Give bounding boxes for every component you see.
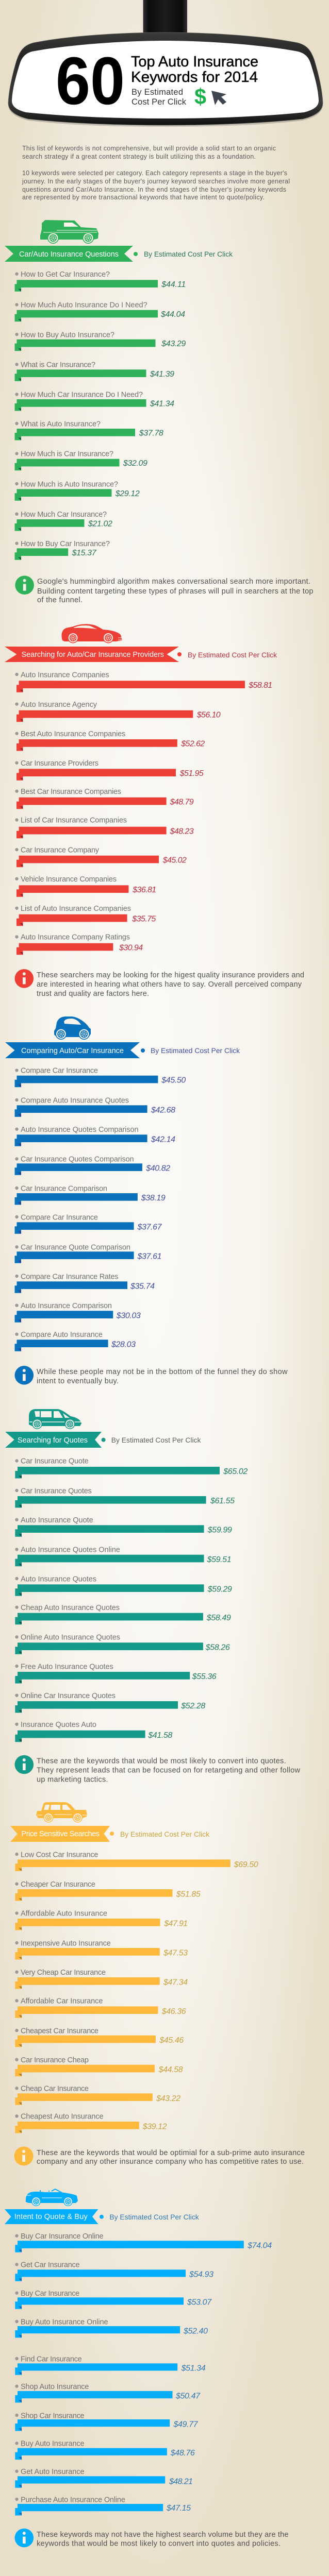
bar: Buy Auto Insurance (15, 2440, 195, 2460)
bar: How to Buy Auto Insurance? (14, 331, 186, 351)
ribbon heading: Intent to Quote & Buy (14, 2213, 88, 2221)
intro text: are represented by more transactional keywords that have intent to quote/policy. (22, 194, 265, 201)
bar: What is Car Insurance? (14, 361, 174, 381)
bar: List of Auto Insurance Companies: $35.75 (131, 914, 156, 923)
mirror stem (143, 0, 187, 36)
callout: hummingbird note: Building content targeting these types of phrases will pull in searchers at the top (37, 587, 314, 596)
bar: Online Auto Insurance Quotes: $58.26 (205, 1643, 230, 1652)
intro text: journey. In the early stages of the buyer's journey keyword searches involve more general (22, 178, 290, 185)
bar: Car Insurance Quote: $65.02 (223, 1467, 248, 1476)
bar: List of Car Insurance Companies (15, 817, 194, 838)
bar: Compare Auto Insurance: Compare Auto Insurance (21, 1331, 103, 1339)
bar: How Much Auto Insurance Do I Need? (14, 301, 185, 321)
bar: List of Auto Insurance Companies (15, 905, 156, 926)
ribbon heading (5, 1432, 102, 1448)
title text: Top Auto Insurance (131, 54, 258, 70)
bar: Auto Insurance Quotes Comparison: $42.14 (151, 1135, 175, 1144)
bar: Purchase Auto Insurance Online (15, 2496, 191, 2515)
bar: Best Auto Insurance Companies (15, 730, 205, 751)
bar: Online Car Insurance Quotes: Online Car Insurance Quotes (21, 1692, 116, 1700)
bar: Very Cheap Car Insurance: $47.34 (163, 1978, 188, 1987)
bar: Buy Car Insurance Online: $74.04 (247, 2242, 272, 2250)
ribbon heading: Car/Auto Insurance Questions (19, 250, 119, 259)
bar: Affordable Car Insurance: Affordable Car Insurance (21, 1997, 103, 2006)
bar: What is Car Insurance?: What is Car Insurance? (21, 361, 95, 369)
bar: Best Auto Insurance Companies: $52.62 (180, 740, 205, 749)
bar: Auto Insurance Quotes Online: Auto Insurance Quotes Online (21, 1546, 120, 1554)
intro text: This list of keywords is not comprehensive, but will provide a solid start to an organic (22, 145, 276, 152)
bar: Cheaper Car Insurance: $51.85 (176, 1890, 201, 1899)
ribbon heading (5, 2209, 98, 2224)
bar: Free Auto Insurance Quotes: $55.36 (192, 1672, 217, 1681)
bar: Online Car Insurance Quotes (15, 1692, 205, 1713)
bar: Free Auto Insurance Quotes: Free Auto Insurance Quotes (21, 1663, 113, 1671)
bar: Auto Insurance Comparison: $30.03 (116, 1311, 141, 1320)
bar: Buy Auto Insurance Online: $52.40 (183, 2327, 208, 2335)
bar: What is Auto Insurance?: $37.78 (139, 429, 163, 438)
bar: Cheap Car Insurance: Cheap Car Insurance (21, 2085, 89, 2093)
callout: hummingbird note: of the funnel. (37, 596, 83, 604)
bar: Car Insurance Providers (15, 759, 204, 781)
bar: How Much is Auto Insurance?: How Much is Auto Insurance? (21, 480, 118, 488)
ribbon heading (5, 246, 133, 262)
bar: Get Car Insurance: Get Car Insurance (21, 2261, 80, 2269)
bar: Cheap Auto Insurance Quotes (15, 1604, 231, 1624)
intro text: questions around Car/Auto Insurance. In the end stages of the buyer's journey keywords (22, 186, 286, 193)
bar: How to Buy Auto Insurance?: How to Buy Auto Insurance? (21, 331, 114, 339)
bar: Auto Insurance Quotes Comparison (14, 1126, 175, 1146)
title text: Keywords for 2014 (131, 69, 258, 86)
bar: Inexpensive Auto Insurance: $47.53 (163, 1948, 188, 1958)
bar: How Much Car Insurance Do I Need?: How Much Car Insurance Do I Need? (21, 391, 143, 399)
callout: provider searchers note (14, 969, 304, 998)
bar: How to Get Car Insurance?: How to Get Car Insurance? (21, 270, 110, 279)
panel: Car/Auto Insurance Questions (5, 220, 314, 604)
legend: by estimated cost per click: By Estimated Cost Per Click (188, 651, 277, 659)
callout: funnel note (14, 1366, 288, 1385)
bar: Auto Insurance Quotes Comparison: Auto Insurance Quotes Comparison (21, 1126, 139, 1134)
bar: Car Insurance Cheap: $44.58 (158, 2065, 183, 2074)
bar: Very Cheap Car Insurance: Very Cheap Car Insurance (21, 1969, 106, 1977)
bar: Purchase Auto Insurance Online: Purchase Auto Insurance Online (21, 2496, 125, 2504)
bar: Auto Insurance Companies: $58.81 (248, 681, 272, 690)
icon: sky-blue convertible (26, 2189, 78, 2206)
bar: Auto Insurance Quote: $59.99 (207, 1526, 232, 1535)
bar: Low Cost Car Insurance: Low Cost Car Insurance (21, 1851, 98, 1859)
bar: Insurance Quotes Auto: Insurance Quotes Auto (21, 1721, 96, 1729)
bar: How Much Car Insurance? (14, 511, 112, 531)
bar: Compare Car Insurance (14, 1067, 186, 1087)
callout: sub-prime note: company and any other insurance company who has competitive rates to use. (37, 2158, 304, 2166)
bar: Car Insurance Comparison (14, 1184, 166, 1205)
title number 60: 60 (56, 43, 125, 118)
bar: Best Car Insurance Companies (15, 788, 194, 809)
subtitle: Cost Per Click (131, 97, 187, 107)
bar: Auto Insurance Agency: $56.10 (196, 710, 221, 719)
intro text: 10 keywords were selected per category. Each category represents a stage in the buyer's (22, 170, 287, 177)
bar: Inexpensive Auto Insurance (15, 1939, 188, 1960)
bar: How to Buy Car Insurance?: $15.37 (72, 549, 97, 557)
bar: Affordable Car Insurance: $46.36 (161, 2007, 186, 2016)
bar: How Much is Car Insurance?: How Much is Car Insurance? (21, 450, 113, 459)
bar: Buy Car Insurance: Buy Car Insurance (21, 2290, 79, 2298)
bar: How to Buy Auto Insurance?: $43.29 (161, 340, 186, 348)
bar: Find Car Insurance (15, 2355, 206, 2375)
bar: How Much is Car Insurance? (14, 450, 147, 470)
panel: Searching for Auto/Car Insurance Providers (5, 624, 304, 998)
bar: Auto Insurance Comparison (14, 1302, 141, 1323)
icon: dollar sign: $ (194, 84, 206, 109)
bar: Best Auto Insurance Companies: Best Auto Insurance Companies (21, 730, 125, 738)
bar: Buy Car Insurance: $53.07 (187, 2298, 212, 2307)
bar: Shop Auto Insurance: Shop Auto Insurance (21, 2383, 89, 2391)
bar: Best Car Insurance Companies: $48.79 (170, 798, 194, 806)
callout: sub-prime note: These are the keywords that would be optimial for a sub-prime auto insurance (37, 2149, 305, 2157)
bar: Compare Car Insurance Rates: Compare Car Insurance Rates (21, 1273, 119, 1281)
bar: Car Insurance Company: $45.02 (162, 856, 187, 865)
callout: sub-prime note (14, 2146, 305, 2166)
bar: Buy Car Insurance Online (15, 2232, 272, 2252)
bar: Low Cost Car Insurance: $69.50 (234, 1860, 258, 1869)
bar: Auto Insurance Companies (15, 671, 272, 692)
bar: How Much Car Insurance?: How Much Car Insurance? (21, 511, 107, 519)
bar: Compare Auto Insurance Quotes (14, 1096, 175, 1117)
bar: Auto Insurance Quotes: Auto Insurance Quotes (21, 1575, 96, 1583)
bar: Cheap Car Insurance (15, 2085, 180, 2105)
bar: Auto Insurance Quotes (15, 1575, 232, 1596)
bar: Get Car Insurance (15, 2261, 213, 2281)
bar: Insurance Quotes Auto (15, 1721, 172, 1742)
panel: Price Sensitive Searches (10, 1802, 305, 2166)
bar: Car Insurance Cheap: Car Insurance Cheap (21, 2056, 89, 2064)
callout: conversion note: These are the keywords that would be most likely to convert into quotes. (37, 1757, 286, 1765)
intro text (22, 145, 290, 201)
bar: Auto Insurance Company Ratings: $30.94 (119, 943, 143, 952)
bar: Auto Insurance Companies: Auto Insurance Companies (21, 671, 109, 679)
bar: Car Insurance Quotes: $61.55 (210, 1497, 235, 1505)
bar: Shop Car Insurance: Shop Car Insurance (21, 2412, 85, 2420)
legend: by estimated cost per click: By Estimated Cost Per Click (111, 1436, 201, 1444)
bar: How Much is Car Insurance?: $32.09 (123, 459, 147, 468)
bar: Auto Insurance Comparison: Auto Insurance Comparison (21, 1302, 112, 1310)
bar: Compare Car Insurance: $45.50 (161, 1076, 186, 1085)
bar: Auto Insurance Agency: Auto Insurance Agency (21, 701, 97, 709)
panel: Comparing Auto/Car Insurance (5, 1016, 288, 1385)
title text (131, 54, 258, 86)
callout: hummingbird note: Google's hummingbird algorithm makes conversational search more important. (37, 578, 310, 586)
ribbon heading (5, 647, 179, 662)
bar: How to Get Car Insurance?: $44.11 (161, 280, 186, 289)
ribbon heading (10, 1826, 110, 1842)
icon: green SUV (40, 220, 98, 244)
bar: Buy Auto Insurance: Buy Auto Insurance (21, 2440, 85, 2448)
bar: Car Insurance Comparison: Car Insurance Comparison (21, 1184, 107, 1193)
bar: Car Insurance Cheap (15, 2056, 183, 2076)
callout: conversion note: up marketing tactics. (37, 1775, 108, 1784)
bar: How Much Car Insurance Do I Need?: $41.34 (150, 400, 174, 408)
subtitle: By Estimated (131, 88, 183, 97)
bar: What is Car Insurance?: $41.39 (150, 370, 174, 379)
bar: Buy Auto Insurance Online: Buy Auto Insurance Online (21, 2318, 108, 2326)
bar: Shop Car Insurance: $49.77 (173, 2420, 199, 2429)
bar: Car Insurance Quotes Comparison: Car Insurance Quotes Comparison (21, 1156, 134, 1164)
icon: teal van (29, 1409, 81, 1429)
callout: funnel note: intent to eventually buy. (37, 1377, 119, 1385)
callout: conversion note: They represent leads that can be focused on for retargeting and other follow (37, 1766, 301, 1774)
bar: Compare Auto Insurance Quotes: Compare Auto Insurance Quotes (21, 1096, 129, 1105)
subtitle (131, 88, 187, 107)
bar: Car Insurance Quotes (15, 1487, 235, 1507)
bar: Shop Auto Insurance: $50.47 (175, 2392, 201, 2400)
bar: Buy Auto Insurance Online (15, 2318, 208, 2338)
bar: How Much Auto Insurance Do I Need?: How Much Auto Insurance Do I Need? (21, 301, 147, 310)
bar: Compare Car Insurance: Compare Car Insurance (21, 1067, 98, 1075)
bar: Auto Insurance Company Ratings: Auto Insurance Company Ratings (21, 934, 130, 942)
bar: Get Auto Insurance (15, 2468, 193, 2488)
mirror glass (12, 41, 319, 118)
bar: Buy Car Insurance Online: Buy Car Insurance Online (21, 2232, 104, 2241)
bar: Car Insurance Company (15, 846, 187, 867)
bar: How Much Car Insurance?: $21.02 (88, 519, 112, 529)
bar: Car Insurance Quotes Comparison (14, 1156, 170, 1175)
bar: Vehicle Insurance Companies (15, 875, 156, 897)
bar: Cheapest Auto Insurance (15, 2113, 167, 2133)
bar: Best Car Insurance Companies: Best Car Insurance Companies (21, 788, 121, 796)
callout: provider searchers note: trust and quality are factors here. (37, 990, 149, 998)
ribbon heading (5, 1042, 140, 1058)
ribbon heading: Comparing Auto/Car Insurance (21, 1047, 124, 1055)
bar: Find Car Insurance: Find Car Insurance (21, 2355, 82, 2363)
legend: by estimated cost per click: By Estimated Cost Per Click (109, 2213, 199, 2221)
bar: Find Car Insurance: $51.34 (181, 2364, 206, 2373)
panel: Intent to Quote & Buy (5, 2189, 289, 2548)
bar: List of Car Insurance Companies: $48.23 (170, 827, 194, 836)
bar: Compare Car Insurance Rates (14, 1273, 155, 1293)
legend: by estimated cost per click: By Estimated Cost Per Click (144, 250, 233, 258)
bar: Buy Car Insurance (15, 2290, 212, 2309)
bar: Car Insurance Quote Comparison: $37.61 (137, 1252, 162, 1261)
bar: Car Insurance Comparison: $38.19 (141, 1194, 166, 1202)
mirror frame (8, 32, 323, 125)
bar: Car Insurance Providers: Car Insurance Providers (21, 759, 98, 768)
bar: Compare Car Insurance (second listing) (14, 1213, 162, 1234)
callout: hummingbird note (15, 575, 314, 604)
bar: Affordable Car Insurance (15, 1997, 186, 2018)
bar: Vehicle Insurance Companies: $36.81 (132, 886, 156, 894)
bar: Affordable Auto Insurance: $47.91 (163, 1920, 188, 1928)
bar: How to Get Car Insurance? (14, 270, 186, 292)
bar: Buy Auto Insurance: $48.76 (170, 2449, 195, 2458)
icon: yellow sedan (36, 1802, 87, 1822)
bar: Car Insurance Quote Comparison (14, 1244, 162, 1263)
callout: conversion note (14, 1755, 301, 1784)
bar: What is Auto Insurance? (14, 420, 163, 440)
callout: provider searchers note: These searchers may be looking for the higest quality insurance providers and (37, 971, 304, 979)
bar: Cheapest Car Insurance: $45.46 (159, 2036, 184, 2045)
callout: search volume note: These keywords may not have the highest search volume but they are the (37, 2531, 289, 2539)
bar: Online Auto Insurance Quotes: Online Auto Insurance Quotes (21, 1634, 120, 1642)
bar: Compare Car Insurance (second listing): Compare Car Insurance (21, 1213, 98, 1222)
bar: Auto Insurance Quotes Online (15, 1546, 232, 1566)
legend: by estimated cost per click: By Estimated Cost Per Click (120, 1831, 209, 1838)
icon: red sports car (61, 624, 122, 643)
bar: Shop Auto Insurance (15, 2383, 201, 2403)
bar: How Much is Auto Insurance? (14, 480, 140, 501)
callout: provider searchers note: are interested in hearing what others have to say. Overall perceived company (37, 980, 302, 989)
bar: Shop Car Insurance (15, 2412, 199, 2431)
callout: search volume note (14, 2529, 289, 2548)
panel: Searching for Quotes (5, 1409, 301, 1784)
bar: Online Car Insurance Quotes: $52.28 (180, 1702, 205, 1710)
ribbon heading: Price Sensitive Searches (22, 1830, 100, 1838)
bar: Cheap Auto Insurance Quotes: Cheap Auto Insurance Quotes (21, 1604, 120, 1612)
bar: Compare Auto Insurance (14, 1331, 136, 1351)
bar: Car Insurance Providers: $51.95 (179, 769, 204, 778)
bar: How Much Auto Insurance Do I Need?: $44.04 (160, 310, 185, 319)
bar: Cheapest Auto Insurance: Cheapest Auto Insurance (21, 2113, 104, 2121)
bar: Vehicle Insurance Companies: Vehicle Insurance Companies (21, 875, 117, 884)
bar: Cheapest Car Insurance (15, 2027, 184, 2047)
bar: Online Auto Insurance Quotes (15, 1634, 230, 1654)
bar: Cheap Car Insurance: $43.22 (156, 2094, 180, 2103)
bar: Purchase Auto Insurance Online: $47.15 (166, 2504, 191, 2513)
bar: What is Auto Insurance?: What is Auto Insurance? (21, 420, 101, 428)
bar: Car Insurance Company: Car Insurance Company (21, 846, 100, 854)
bar: How Much is Auto Insurance?: $29.12 (115, 489, 140, 498)
bar: Affordable Auto Insurance (15, 1910, 188, 1930)
bar: Auto Insurance Quote: Auto Insurance Quote (21, 1516, 93, 1524)
bar: Compare Car Insurance Rates: $35.74 (130, 1282, 155, 1291)
bar: Auto Insurance Quote (15, 1516, 232, 1537)
bar: Compare Auto Insurance: $28.03 (111, 1340, 136, 1349)
bar: Affordable Auto Insurance: Affordable Auto Insurance (21, 1910, 107, 1918)
bar: Cheaper Car Insurance: Cheaper Car Insurance (21, 1880, 95, 1889)
intro text: search strategy if a great content strategy is built utilizing this as a foundation. (22, 153, 256, 160)
icon: blue compact car (54, 1016, 91, 1040)
bar: Get Car Insurance: $54.93 (189, 2270, 213, 2279)
bar: Free Auto Insurance Quotes (15, 1663, 217, 1684)
bar: Car Insurance Quote (15, 1458, 248, 1479)
callout: search volume note: keywords that would be most likely to convert into quotes and policies. (37, 2540, 281, 2548)
bar: Auto Insurance Quotes: $59.29 (207, 1585, 232, 1594)
bar: List of Auto Insurance Companies: List of Auto Insurance Companies (21, 905, 131, 913)
header: rear-view mirror (8, 0, 323, 127)
bar: Cheap Auto Insurance Quotes: $58.49 (206, 1614, 231, 1622)
bar: Auto Insurance Company Ratings (15, 934, 143, 955)
ribbon heading: Searching for Auto/Car Insurance Providers (22, 651, 164, 659)
bar: Get Auto Insurance: $48.21 (169, 2477, 193, 2486)
bar: Cheaper Car Insurance (15, 1880, 201, 1901)
ribbon heading: Searching for Quotes (18, 1436, 88, 1445)
legend: by estimated cost per click: By Estimated Cost Per Click (151, 1047, 240, 1055)
bar: Car Insurance Quotes Comparison: $40.82 (145, 1164, 170, 1173)
bar: Auto Insurance Agency (15, 701, 221, 722)
bar: Auto Insurance Quotes Online: $59.51 (207, 1555, 232, 1564)
bar: Compare Auto Insurance Quotes: $42.68 (151, 1106, 175, 1114)
bar: Very Cheap Car Insurance (15, 1969, 188, 1989)
bar: Car Insurance Quote Comparison: Car Insurance Quote Comparison (21, 1244, 130, 1252)
bar: Car Insurance Quotes: Car Insurance Quotes (21, 1487, 92, 1495)
bar: Insurance Quotes Auto: $41.58 (147, 1731, 172, 1740)
bar: How to Buy Car Insurance?: How to Buy Car Insurance? (21, 540, 110, 548)
callout: funnel note: While these people may not be in the bottom of the funnel they do show (37, 1368, 288, 1376)
bar: Low Cost Car Insurance (15, 1851, 258, 1871)
bar: How to Buy Car Insurance? (14, 540, 110, 560)
icon: cursor arrow (211, 91, 226, 105)
bar: Compare Car Insurance (second listing): $37.67 (137, 1223, 162, 1231)
bar: Get Auto Insurance: Get Auto Insurance (21, 2468, 85, 2476)
bar: How Much Car Insurance Do I Need? (14, 391, 174, 411)
bar: List of Car Insurance Companies: List of Car Insurance Companies (21, 817, 127, 825)
bar: Cheapest Auto Insurance: $39.12 (142, 2123, 167, 2131)
bar: Car Insurance Quote: Car Insurance Quote (21, 1458, 89, 1466)
bar: Cheapest Car Insurance: Cheapest Car Insurance (21, 2027, 98, 2035)
mirror shadow (8, 35, 323, 127)
bar: Inexpensive Auto Insurance: Inexpensive Auto Insurance (21, 1939, 111, 1947)
